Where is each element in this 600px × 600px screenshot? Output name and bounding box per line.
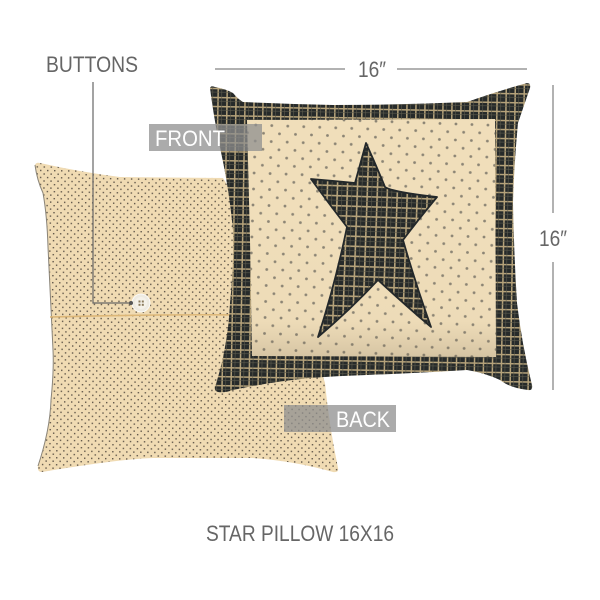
label: FRONT [149, 124, 262, 151]
dimension: width 16 inches: 16″ [358, 57, 386, 82]
front centre panel [247, 119, 496, 357]
label: FRONT: FRONT [155, 126, 225, 151]
caption: STAR PILLOW 16X16 [206, 521, 394, 546]
back pillow [35, 163, 338, 472]
star applique [311, 143, 437, 337]
front pillow [210, 83, 532, 392]
label: BACK: BACK [336, 407, 390, 432]
seam [50, 315, 240, 317]
label: BUTTONS with leader line [46, 52, 138, 305]
label: BUTTONS with leader line: BUTTONS [46, 52, 138, 77]
label: BACK [284, 405, 396, 432]
button [132, 294, 150, 312]
dimension: height 16 inches: 16″ [539, 226, 567, 251]
